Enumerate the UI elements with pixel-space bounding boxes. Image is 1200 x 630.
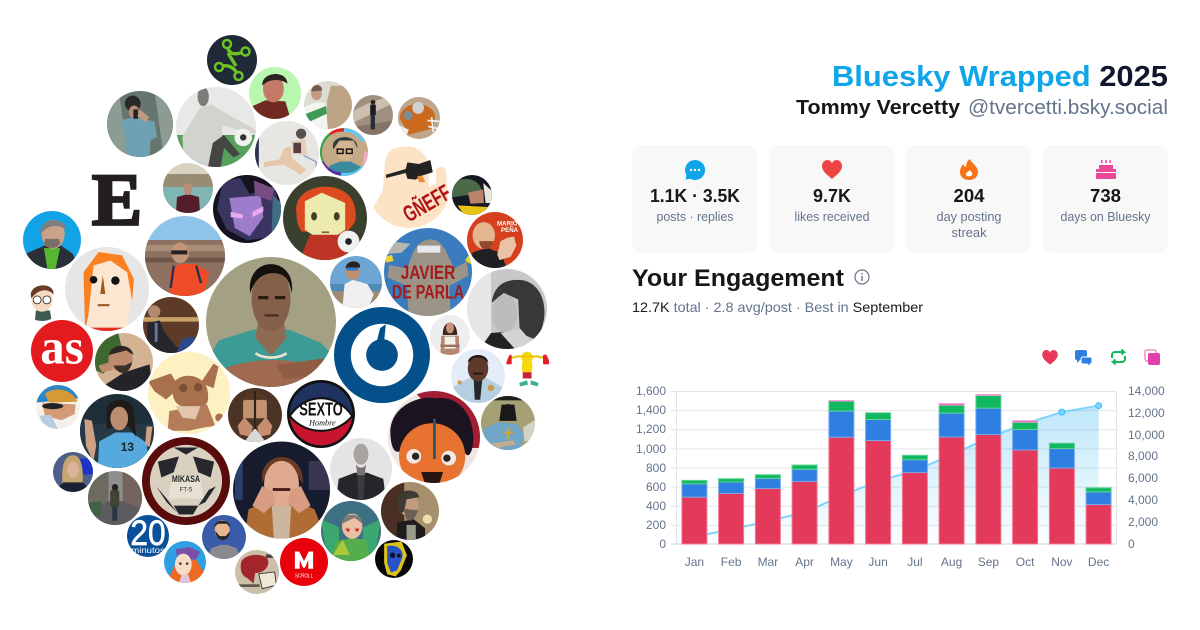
avatar: bearded man side — [381, 482, 439, 540]
panel: likes received: likes received — [794, 210, 870, 224]
avatar: Eevee — [148, 352, 230, 434]
avatar: Javier de Parla: JAVIER — [401, 262, 455, 284]
avatar: bearded cartoon on blue — [202, 515, 246, 559]
avatar: orange hair cartoon — [65, 247, 149, 331]
avatar: M Scroll logo — [280, 538, 328, 586]
left axis labels: 1,400 — [636, 403, 666, 417]
avatar: Mario Peña — [467, 212, 523, 268]
avatar: 20 minutos logo: 20 — [130, 514, 166, 553]
left axis labels — [636, 384, 666, 551]
icon: reposts — [1112, 350, 1125, 364]
engagement summary: 12.7K total · 2.8 avg/post · Best in September — [632, 299, 923, 315]
user name and handle — [796, 97, 1168, 119]
left axis labels: 0 — [659, 537, 666, 551]
stacked bars — [682, 394, 1111, 544]
avatar: Javier de Parla — [384, 228, 472, 316]
user name and handle: Tommy Vercetty — [796, 97, 961, 119]
avatar: Tweety weightlifter — [506, 352, 550, 386]
month labels: Jul — [907, 555, 923, 569]
avatar: cap boy — [36, 385, 80, 429]
avatar: street walker — [88, 471, 142, 525]
avatar: GÑEFF bald man: GÑEFF — [398, 179, 455, 227]
avatar: man on blue — [23, 211, 81, 269]
panel: days on Bluesky: 738 — [1090, 186, 1121, 206]
avatar: bearded man leaning — [95, 333, 153, 391]
avatar: man on green — [249, 67, 301, 119]
month labels: Nov — [1051, 555, 1073, 569]
avatar: blonde woman — [53, 452, 93, 492]
right axis labels: 8,000 — [1128, 449, 1158, 463]
avatar: red-haired woman cartoon — [164, 541, 206, 583]
icon: quotes — [1145, 350, 1160, 365]
left axis labels: 1,600 — [636, 384, 666, 398]
avatar: gears helmet — [398, 97, 440, 139]
avatar: SEXTO Hombre logo — [287, 380, 355, 448]
panel: posts and replies: 1.1K · 3.5K — [650, 186, 740, 206]
avatar: mirrored man — [228, 388, 282, 442]
left axis labels: 600 — [646, 480, 666, 494]
avatar: woman on rocks — [353, 95, 393, 135]
chart legend icons — [1042, 350, 1160, 366]
avatar: red-haired anime girl — [283, 176, 367, 260]
avatar: green jungle cartoon — [321, 501, 381, 561]
panel: posts and replies: posts · replies — [656, 210, 734, 224]
left axis labels: 1,200 — [636, 422, 666, 436]
avatar: rainbow ring doodle — [320, 128, 368, 176]
right axis labels: 10,000 — [1128, 428, 1165, 442]
right axis labels: 6,000 — [1128, 471, 1158, 485]
avatar: purple character — [213, 175, 281, 243]
panel: day posting streak: streak — [952, 226, 987, 240]
avatar: E logo — [92, 174, 140, 226]
avatar: Vice City — [206, 257, 336, 387]
icon: heart — [822, 160, 842, 179]
heading: Your Engagement: Your Engagement — [632, 265, 844, 292]
avatar: finger smile — [233, 442, 330, 538]
avatar: M Scroll logo: SCROLL — [295, 573, 313, 579]
month labels: Jun — [868, 555, 888, 569]
avatar: Mikasa ball: MIKASA — [172, 474, 201, 484]
month labels: Feb — [721, 555, 742, 569]
avatar cloud — [20, 35, 550, 594]
avatar: colosseum tourist — [145, 216, 225, 296]
combined bar and line chart — [636, 384, 1165, 569]
month labels: Dec — [1088, 555, 1109, 569]
right axis labels — [1128, 384, 1165, 551]
panel: day posting streak — [906, 145, 1031, 253]
right axis labels: 14,000 — [1128, 384, 1165, 398]
avatar: AS logo: as — [40, 319, 84, 374]
avatar: SEXTO Hombre logo: SEXTO — [299, 398, 343, 419]
panel: posts and replies — [632, 145, 757, 253]
left axis labels: 200 — [646, 518, 666, 532]
avatar: Mario Peña: PEÑA — [501, 227, 519, 234]
avatar: red brain doodle — [235, 550, 279, 594]
icon: likes — [1042, 350, 1058, 365]
panel: days on Bluesky — [1043, 145, 1168, 253]
icon: cake — [1096, 160, 1116, 179]
panel: likes received: 9.7K — [813, 186, 851, 206]
right axis labels: 4,000 — [1128, 493, 1158, 507]
avatar: 20 minutos logo: minutos — [131, 545, 165, 555]
user name and handle: @tvercetti.bsky.social — [968, 97, 1168, 119]
avatar: Mikasa ball: FT-5 — [180, 487, 193, 494]
icon: replies — [1075, 350, 1092, 366]
panel: day posting streak: 204 — [954, 186, 984, 206]
avatar: E logo: E — [92, 159, 142, 241]
right axis labels: 12,000 — [1128, 406, 1165, 420]
avatar: glasses cartoon — [30, 285, 54, 321]
month labels: May — [830, 555, 853, 569]
panel: likes received — [769, 145, 894, 253]
left axis labels: 1,000 — [636, 442, 666, 456]
panel: day posting streak: day posting — [936, 210, 1002, 224]
month labels: Sep — [978, 555, 999, 569]
month labels: Apr — [795, 555, 814, 569]
avatar: Mikasa ball — [142, 437, 230, 525]
left axis labels: 400 — [646, 499, 666, 513]
icon: info — [855, 270, 869, 284]
avatar: parliament — [143, 297, 199, 353]
avatar: SEXTO Hombre logo: Hombre — [308, 419, 336, 428]
avatar: mirror selfie — [107, 91, 173, 158]
panel: days on Bluesky: days on Bluesky — [1060, 210, 1151, 224]
avatar: B&W man in suit — [330, 438, 392, 500]
avatar: GÑEFF bald man — [368, 146, 455, 228]
month labels: Oct — [1016, 555, 1035, 569]
cumulative area and line — [694, 403, 1102, 544]
avatar: Darth Vader office — [481, 396, 535, 450]
avatar: helmet driver — [452, 175, 492, 215]
avatar: Javier de Parla: DE PARLA — [392, 281, 464, 303]
avatar: sketch lady — [255, 121, 319, 185]
avatar: woman in white — [430, 315, 470, 355]
avatar: AS logo — [31, 319, 93, 382]
avatar: green X logo — [207, 35, 257, 85]
avatar: man in white shirt — [330, 256, 382, 308]
title: Bluesky Wrapped 2025 — [832, 61, 1168, 93]
avatar: B&W woman — [467, 269, 547, 349]
avatar: footballer 13 — [80, 394, 154, 468]
avatar: blue ring logo — [334, 307, 430, 403]
avatar: hat character — [388, 391, 480, 489]
right axis labels: 0 — [1128, 537, 1135, 551]
month labels: Mar — [758, 555, 778, 569]
right axis labels: 2,000 — [1128, 515, 1158, 529]
avatar: footballer 13: 13 — [121, 440, 134, 454]
avatar: statue with ball — [176, 87, 256, 167]
avatar: police officer — [451, 349, 505, 403]
month labels — [685, 555, 1109, 569]
left axis labels: 800 — [646, 461, 666, 475]
avatar: man at fountain — [163, 163, 213, 213]
avatar: man with sand sculpture — [304, 81, 352, 129]
avatar: blue skull — [375, 540, 413, 578]
avatar: Mario Peña: MARIO — [497, 220, 518, 227]
icon: flame — [960, 159, 978, 180]
month labels: Aug — [941, 555, 962, 569]
month labels: Jan — [685, 555, 704, 569]
icon: chat bubble — [685, 160, 705, 180]
